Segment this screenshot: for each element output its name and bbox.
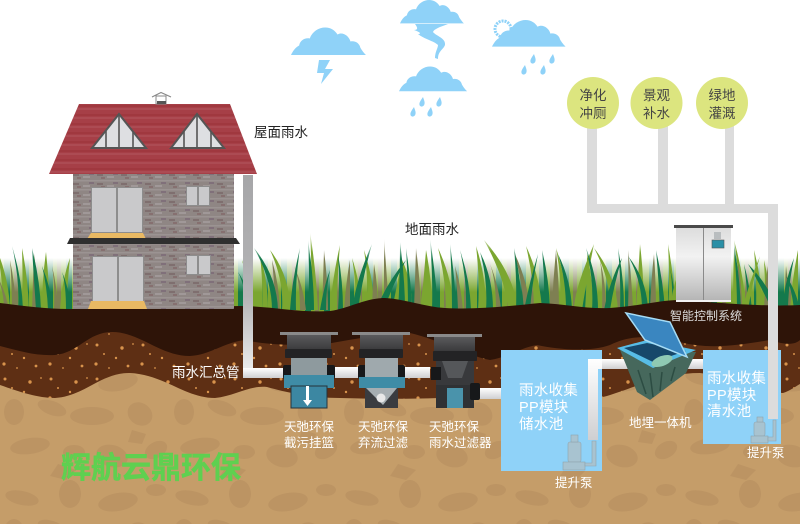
soil: pebble layer (0, 332, 800, 420)
grass (0, 234, 800, 312)
circle: landscape water: 景观 (643, 88, 670, 103)
label: right pump: 提升泵 (747, 445, 785, 460)
clean pool label: PP模块 (707, 387, 757, 404)
label: diverter: 天弛环保 (358, 420, 409, 434)
roof (49, 104, 257, 174)
title: 辉航云鼎环保 (61, 452, 241, 485)
label: trash basket: 截污挂篮 (284, 435, 334, 450)
label: integrated unit: 地埋一体机 (629, 416, 692, 430)
integrated underground unit (617, 313, 696, 400)
balcony band (67, 238, 240, 244)
label: filter: 雨水过滤器 (429, 436, 492, 450)
roof rainwater downpipe (243, 175, 287, 378)
lower step (88, 301, 147, 309)
control-to-use main pipe (587, 125, 778, 419)
label: main rain pipe: 雨水汇总管 (172, 365, 240, 380)
circle: toilet flushing: 净化 (580, 88, 606, 103)
pump (563, 435, 596, 470)
label: left pump: 提升泵 (555, 475, 593, 490)
upper step (87, 233, 146, 239)
soil: dark topsoil layer (0, 298, 800, 400)
tank pipe (588, 359, 602, 440)
soil: bottom tan layer (0, 373, 800, 524)
circle: toilet flushing: 冲厕 (580, 106, 606, 121)
upper window (186, 186, 210, 206)
pump (751, 417, 776, 443)
roof vent (152, 92, 171, 104)
weather icon: tornado cloud (400, 0, 464, 59)
circle: green irrigation (696, 77, 748, 129)
label: ground rainwater: 地面雨水 (405, 222, 459, 237)
product: trash basket filter (280, 332, 338, 408)
label: diverter: 弃流过滤 (358, 435, 409, 450)
label: roof rainwater: 屋面雨水 (254, 125, 308, 140)
circle: toilet flushing (567, 77, 619, 129)
weather icon: thunder cloud (291, 28, 366, 84)
use circles (567, 77, 748, 129)
lid (626, 313, 687, 357)
upper door (92, 187, 142, 233)
lower door (92, 256, 144, 302)
storage pool label: 储水池 (519, 416, 563, 433)
circle: green irrigation: 绿地 (708, 88, 736, 103)
grass base band (0, 259, 800, 312)
weather icon: rain cloud (399, 66, 467, 117)
storage pool label: 雨水收集 (519, 382, 578, 399)
lower window (186, 255, 210, 275)
right dormer window (171, 114, 224, 148)
house walls (73, 174, 234, 309)
storage pool label: PP模块 (519, 399, 569, 416)
tank: storage pool (501, 350, 602, 471)
weather icon: sun and rain cloud (492, 20, 566, 75)
house (49, 92, 257, 309)
label: trash basket: 天弛环保 (284, 420, 335, 434)
control cabinet (674, 225, 733, 302)
clean pool label: 清水池 (707, 403, 751, 420)
product: rainwater filter (427, 334, 482, 408)
circle: green irrigation: 灌溉 (708, 106, 736, 121)
circle: landscape water (630, 77, 682, 129)
connecting white pipes (333, 359, 706, 399)
label: control system: 智能控制系统 (670, 308, 742, 323)
circle: landscape water: 补水 (643, 106, 670, 121)
clean pool label: 雨水收集 (707, 370, 766, 387)
label: filter: 天弛环保 (429, 420, 480, 434)
tank: clean water pool (703, 350, 781, 444)
product: initial rainwater diverter (352, 332, 410, 408)
left dormer window (92, 114, 146, 148)
